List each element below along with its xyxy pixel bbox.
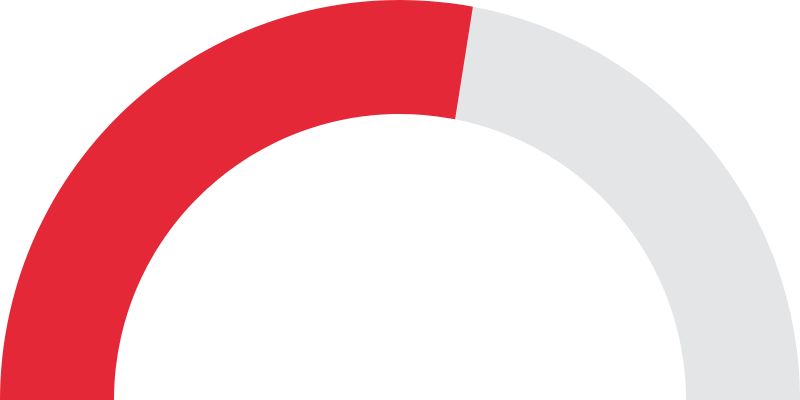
gauge segment: filled portion (red): [0, 0, 473, 400]
gauge segment: remaining portion (grey): [455, 7, 800, 400]
